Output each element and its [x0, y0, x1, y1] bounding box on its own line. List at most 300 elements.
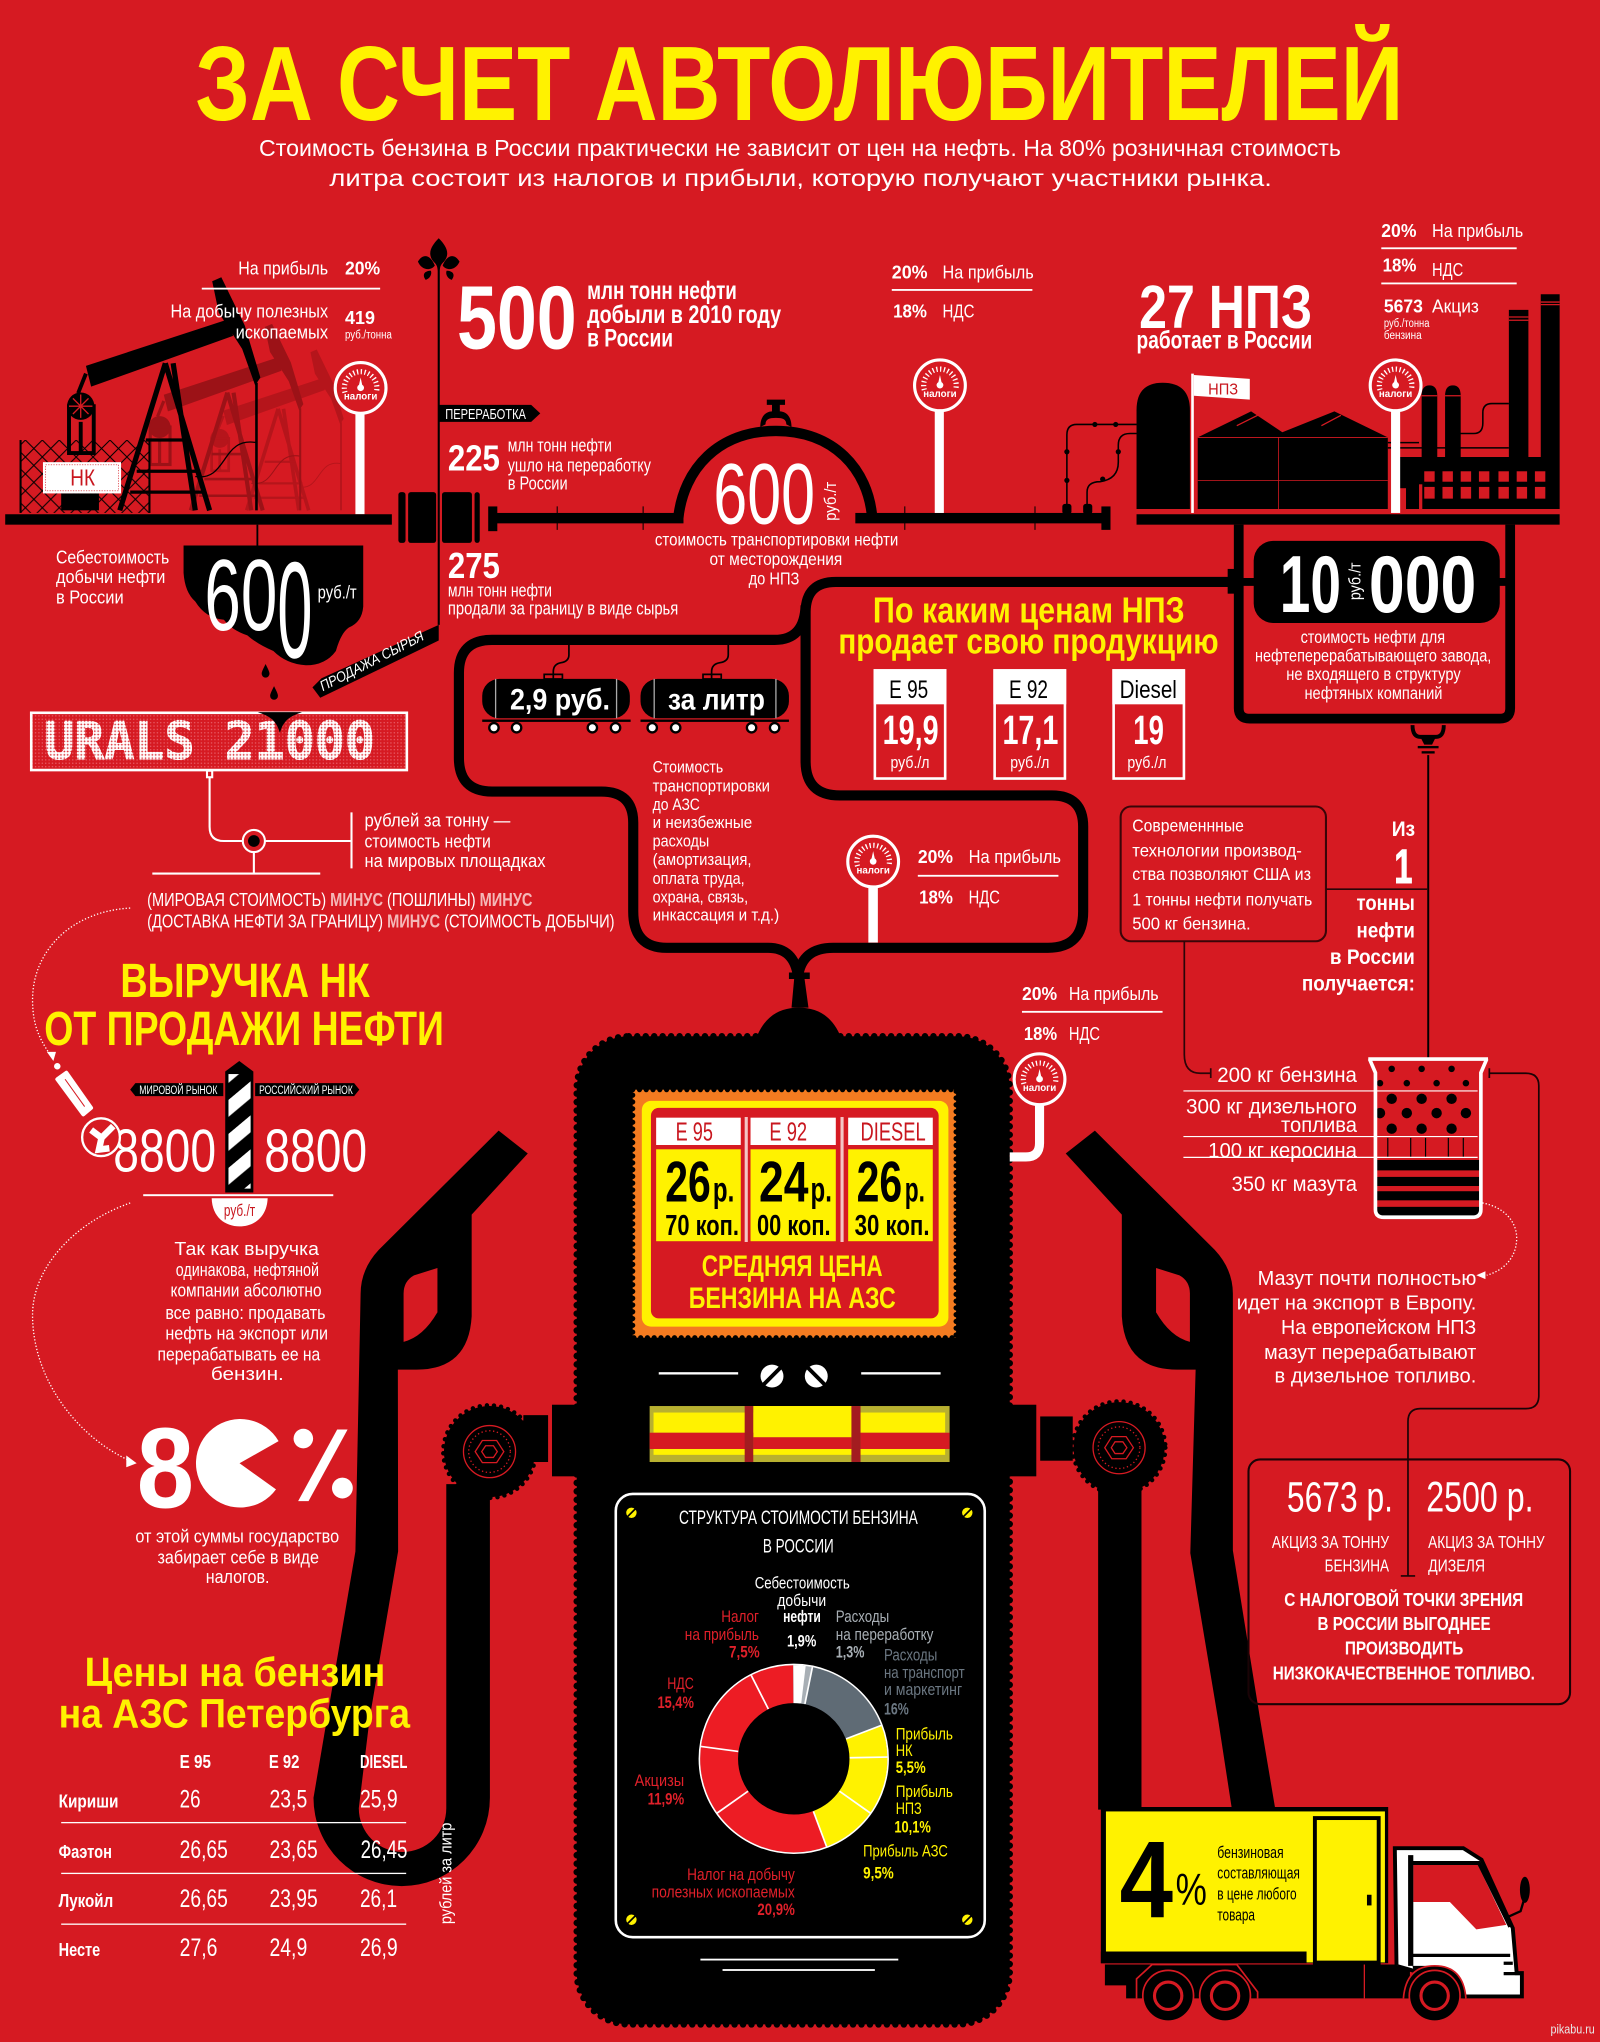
text: state share	[135, 1527, 339, 1587]
pump price screen: СРЕДНЯЯ ЦЕНА	[702, 1250, 883, 1283]
text: transport to stations: Стоимость	[653, 758, 723, 777]
truck percent: %	[1176, 1866, 1207, 1915]
tag: processing: ПЕРЕРАБОТКА	[445, 406, 526, 423]
gauge: transport	[915, 360, 965, 513]
valve and line to beaker	[1413, 725, 1444, 1058]
table values: 23,65	[269, 1837, 318, 1864]
cost pill	[1254, 541, 1500, 623]
donut labels: expenses: Расходы	[836, 1607, 889, 1626]
text: fuel oil: в дизельное топливо.	[1275, 1366, 1476, 1388]
tax note: transport: 18%	[893, 302, 927, 322]
text: fuel oil: На европейском НПЗ	[1281, 1317, 1476, 1339]
table values: 26	[180, 1787, 200, 1814]
pump jack mid	[149, 324, 303, 510]
truck percent: составляющая	[1217, 1865, 1300, 1883]
text: fuel oil: мазут перерабатывают	[1264, 1342, 1476, 1364]
ticker connector	[152, 771, 352, 874]
tax note: wholesale	[918, 847, 1061, 908]
tax note: refinery: бензина	[1384, 329, 1422, 342]
price card diesel	[1112, 669, 1185, 779]
beaker labels: 350 кг мазута	[1232, 1173, 1357, 1196]
tax note: refinery: На прибыль	[1432, 221, 1523, 241]
price card E 92	[993, 669, 1066, 779]
beaker labels	[1186, 1064, 1357, 1196]
tax note: pump	[1022, 984, 1163, 1044]
tag: crude sale: ПРОДАЖА СЫРЬЯ	[317, 628, 427, 695]
stat: transport 600: 600	[713, 446, 815, 542]
excise conclusion: ПРОИЗВОДИТЬ	[1345, 1638, 1463, 1659]
truck percent	[1120, 1820, 1300, 1942]
text: from 1 ton: получается:	[1302, 972, 1415, 996]
text: transport to stations: до АЗС	[653, 795, 700, 814]
silo	[1137, 383, 1190, 509]
oil blob with 600: 60	[204, 538, 277, 652]
text: transport to stations: транспортировки	[653, 776, 770, 795]
price card diesel: Diesel	[1120, 677, 1177, 704]
table values: 26,65	[180, 1837, 228, 1864]
excise petrol: 5673 р.	[1287, 1473, 1393, 1521]
ground bar: refinery	[1137, 514, 1560, 525]
text: state share: налогов.	[206, 1567, 269, 1587]
tax note: transport	[892, 263, 1034, 322]
donut labels: profit: Прибыль АЗС	[863, 1841, 948, 1860]
gauge and pipe: pump taxes	[1010, 1054, 1065, 1157]
callout: US technology: технологии производ-	[1132, 841, 1302, 861]
donut labels: production cost: добычи	[777, 1591, 826, 1610]
dome tap	[760, 400, 792, 427]
excise diesel: ДИЗЕЛЯ	[1428, 1555, 1485, 1575]
donut labels: tax red: Налог на добычу	[687, 1865, 795, 1884]
grade E 92	[751, 1116, 836, 1242]
donut labels: expenses: 1,3%	[836, 1642, 864, 1661]
flag: НПЗ	[1208, 381, 1238, 398]
table row names: Фаэтон	[59, 1842, 112, 1862]
oil field: pump jacks	[20, 277, 344, 513]
factory	[1397, 294, 1560, 509]
table values: 26,1	[360, 1886, 397, 1913]
tax note: refinery: 18%	[1383, 255, 1416, 275]
stat: 225: 225	[448, 438, 500, 479]
donut labels: tax red: полезных ископаемых	[652, 1882, 795, 1901]
stat: 275: 275	[448, 545, 500, 586]
text: production cost	[56, 548, 169, 607]
tax note: extraction: На добычу полезных	[171, 302, 328, 322]
stat: transport 600: руб./т	[821, 481, 840, 521]
table header: DIESEL	[360, 1752, 407, 1772]
text: fuel oil: идет на экспорт в Европу.	[1237, 1293, 1476, 1315]
text: refinery oil cost: стоимость нефти для	[1301, 627, 1445, 647]
tax note: wholesale: НДС	[969, 888, 1000, 908]
price card diesel: руб./л	[1127, 754, 1166, 772]
text: from 1 ton: 1	[1394, 840, 1413, 894]
ticker connector node	[248, 835, 260, 847]
text: transport to stations: и неизбежные	[653, 813, 752, 832]
truck chassis	[1105, 1965, 1410, 1998]
oil drips	[262, 664, 278, 700]
tax note: refinery: НДС	[1432, 260, 1463, 280]
grade diesel: 26	[857, 1151, 902, 1215]
tax note: wholesale: 18%	[919, 888, 953, 908]
oil blob with 600: 0	[277, 534, 312, 687]
tax note: transport: На прибыль	[943, 263, 1034, 283]
icon: barrels	[398, 492, 480, 543]
tax note: extraction: руб./тонна	[345, 328, 392, 341]
donut labels: profit: Прибыль	[896, 1724, 953, 1743]
tax note: extraction	[171, 259, 392, 342]
panel: cost structure	[616, 1494, 985, 1937]
tax note: wholesale: На прибыль	[969, 847, 1061, 867]
text: world price note: на мировых площадках	[365, 851, 545, 871]
donut labels: tax red: 15,4%	[657, 1693, 694, 1712]
frame: refinery oil cost: руб./т	[1345, 562, 1364, 600]
tax note: pump: На прибыль	[1069, 984, 1159, 1004]
heading: NK revenue: ОТ ПРОДАЖИ НЕФТИ	[44, 1002, 444, 1056]
text: fuel oil	[1237, 1268, 1476, 1388]
НК plate	[43, 462, 121, 510]
heading: refinery prices: По каким ценам НПЗ	[873, 589, 1185, 630]
text: revenue explanation: одинакова, нефтяной	[176, 1260, 319, 1280]
callout: US technology: ства позволяют США из	[1132, 864, 1311, 884]
grade diesel: р.	[905, 1171, 925, 1210]
excise petrol: БЕНЗИНА	[1325, 1555, 1389, 1575]
donut chart	[699, 1664, 888, 1853]
tank wagon: per liter: за литр	[668, 684, 765, 717]
tax note: pump: 18%	[1024, 1024, 1057, 1044]
subtitle: Стоимость бензина в России практически не зависит от цен на нефть. На 80% розничная стоимость	[259, 135, 1341, 161]
text: revenue explanation: компании абсолютно	[171, 1281, 322, 1301]
table values: 26,9	[360, 1935, 398, 1962]
stat: 275	[448, 545, 678, 618]
text: revenue explanation: бензин.	[211, 1364, 284, 1384]
icon: magnifier tool	[54, 1063, 120, 1156]
pipework joints	[1062, 422, 1121, 514]
grade E 92: E 92	[769, 1116, 807, 1146]
excise diesel: АКЦИЗ ЗА ТОННУ	[1428, 1532, 1545, 1552]
text: fuel oil: Мазут почти полностью	[1258, 1268, 1476, 1290]
beaker labels: 100 кг керосина	[1208, 1139, 1357, 1162]
tax note: refinery: руб./тонна	[1384, 317, 1430, 330]
grade E 95: E 95	[676, 1116, 713, 1146]
excise petrol	[1272, 1473, 1393, 1575]
connector to oil blob	[256, 525, 258, 547]
gauge: wholesale	[848, 836, 899, 943]
callout: US technology	[1121, 807, 1428, 1078]
stat: 500 million tons	[457, 268, 781, 368]
heading: refinery prices	[838, 589, 1219, 662]
donut labels: expenses: Расходы	[884, 1646, 937, 1665]
truck percent: 4	[1120, 1820, 1173, 1942]
text: transport to stations: оплата труда,	[653, 869, 745, 888]
text: world price note	[365, 811, 545, 871]
grade E 95: 70 коп.	[665, 1210, 739, 1242]
unit tab: руб./т	[224, 1201, 255, 1220]
right hose wheel	[1073, 1401, 1165, 1494]
oil blob with 600	[184, 534, 363, 687]
gauge: extraction	[335, 363, 386, 514]
tax note: transport: 20%	[892, 263, 928, 283]
text: state share: забирает себе в виде	[158, 1548, 319, 1568]
pump price screen	[633, 1090, 956, 1338]
truck	[1101, 1807, 1530, 2021]
tax note: refinery: 5673	[1384, 296, 1423, 316]
table: petersburg prices	[59, 1752, 407, 1962]
panel heading: СТРУКТУРА СТОИМОСТИ БЕНЗИНА	[679, 1507, 918, 1529]
text: from 1 ton: тонны	[1357, 891, 1415, 915]
price card E 95: E 95	[889, 677, 928, 704]
beaker labels: 200 кг бензина	[1217, 1064, 1357, 1087]
excise conclusion: С НАЛОГОВОЙ ТОЧКИ ЗРЕНИЯ	[1284, 1589, 1523, 1610]
donut labels: tax red: на прибыль	[685, 1625, 759, 1644]
unit label: rubles per liter: рублей за литр	[437, 1823, 456, 1924]
tax note: pump: 20%	[1022, 984, 1057, 1004]
tax note: extraction: 20%	[345, 259, 380, 279]
panel heading: В РОССИИ	[763, 1535, 834, 1557]
callout: US technology: 500 кг бензина.	[1132, 914, 1251, 934]
table values: 26,45	[361, 1837, 407, 1864]
refinery pipework	[1067, 404, 1509, 509]
donut labels: expenses: 16%	[884, 1700, 909, 1719]
table header: E 92	[269, 1752, 299, 1772]
donut labels: profit: НПЗ	[896, 1799, 922, 1818]
frame: refinery oil cost	[1228, 525, 1510, 719]
text: from 1 ton: Из	[1392, 817, 1415, 841]
oil blob with 600: руб./т	[318, 582, 357, 602]
excise diesel	[1426, 1473, 1545, 1575]
gauge and pipe: pump taxes: налоги	[1023, 1083, 1056, 1094]
truck percent: бензиновая	[1217, 1844, 1284, 1862]
tax note: refinery: 20%	[1381, 221, 1416, 241]
truck percent: в цене любого	[1217, 1885, 1297, 1903]
frame: refinery oil cost: 10	[1280, 540, 1341, 630]
flag	[1191, 374, 1250, 513]
tag: world market: МИРОВОЙ РЫНОК	[139, 1084, 218, 1097]
truck mirror	[1506, 1898, 1524, 1918]
stat: 27 refineries	[1137, 273, 1312, 354]
donut labels: profit: НК	[896, 1741, 913, 1760]
table row names: Кириши	[59, 1792, 118, 1812]
donut labels: tax red: 20,9%	[757, 1900, 795, 1919]
beaker labels: топлива	[1281, 1114, 1357, 1137]
heading: petersburg prices	[59, 1649, 411, 1737]
tag: world market	[130, 1083, 223, 1097]
donut labels: tax red	[635, 1607, 795, 1919]
stat: 225: в России	[508, 474, 568, 494]
grade diesel: DIESEL	[861, 1116, 926, 1146]
donut labels: profit: 9,5%	[863, 1864, 894, 1883]
grade E 95: р.	[713, 1171, 734, 1210]
truck cargo box	[1101, 1807, 1388, 1963]
truck wheels	[1137, 1965, 1466, 2021]
refinery buildings	[1198, 411, 1388, 509]
text: formula: (МИРОВАЯ СТОИМОСТЬ) МИНУС (ПОШЛИНЫ) МИНУС	[147, 890, 532, 910]
text: transport to stations: (амортизация,	[653, 850, 752, 869]
excise conclusion	[1273, 1589, 1535, 1683]
tank wagon: price	[482, 644, 631, 732]
dotted arrow: to tool	[33, 908, 130, 1061]
text: transport to stations: инкассация и т.д.)	[653, 905, 779, 924]
donut labels: expenses: на переработку	[836, 1625, 934, 1644]
oil spade icon and main line	[418, 238, 460, 625]
donut separators	[701, 1666, 887, 1847]
stat: transport 600: до НПЗ	[749, 569, 799, 589]
pump jack main	[67, 277, 260, 510]
price card diesel: 19	[1133, 707, 1164, 753]
donut labels: tax red: 11,9%	[648, 1789, 684, 1808]
price card E 92: 17,1	[1002, 707, 1058, 753]
price card E 92: E 92	[1009, 677, 1048, 704]
text: world price note: стоимость нефти	[365, 832, 491, 852]
gauge: extraction: налоги	[344, 392, 377, 403]
donut labels: expenses: и маркетинг	[884, 1680, 962, 1699]
text: transport to stations: охрана, связь,	[653, 888, 748, 907]
donut labels: production cost: нефти	[783, 1607, 821, 1626]
gauge: wholesale: налоги	[856, 866, 890, 877]
tax note: extraction: На прибыль	[238, 259, 328, 279]
heading: petersburg prices: на АЗС Петербурга	[59, 1691, 411, 1737]
text: production cost: добычи нефти	[56, 567, 165, 587]
text: world price note: рублей за тонну —	[365, 811, 511, 831]
price card E 95: руб./л	[890, 754, 930, 772]
callout: US technology: Современнные	[1132, 816, 1244, 836]
stat: transport 600	[655, 446, 898, 589]
values: 8800	[113, 1118, 367, 1185]
left fuel nozzle and hose	[313, 1131, 528, 1886]
stat: 500 million tons: в России	[587, 325, 673, 352]
price card E 95	[874, 669, 946, 779]
tax note: refinery: Акциз	[1432, 296, 1479, 316]
donut labels: tax red: НДС	[667, 1674, 694, 1693]
text: production cost: Себестоимость	[56, 548, 169, 568]
table header	[180, 1752, 407, 1772]
right fuel nozzle and hose	[1066, 1131, 1275, 1810]
donut labels: expenses	[836, 1607, 965, 1719]
table values: 24,9	[269, 1935, 307, 1962]
gauge: refinery	[1370, 360, 1421, 513]
text: formula	[147, 890, 614, 932]
table values	[180, 1787, 407, 1962]
table values: 25,9	[360, 1787, 398, 1814]
tax note: wholesale: 20%	[918, 847, 953, 867]
text: revenue explanation: нефть на экспорт или	[165, 1324, 328, 1344]
tax note: transport: НДС	[943, 302, 974, 322]
stat: 225	[448, 436, 652, 494]
excise conclusion: В РОССИИ ВЫГОДНЕЕ	[1317, 1613, 1491, 1634]
grade E 92: 00 коп.	[757, 1210, 831, 1242]
stat: 275: млн тонн нефти	[448, 580, 552, 600]
stat: 500 million tons: млн тонн нефти	[587, 278, 737, 305]
border post	[225, 1061, 253, 1193]
pump jack far	[210, 350, 344, 510]
donut labels: expenses: на транспорт	[884, 1663, 965, 1682]
text: from 1 ton	[1302, 817, 1415, 996]
beaker labels: 300 кг дизельного	[1186, 1096, 1357, 1119]
text: refinery oil cost: нефтяных компаний	[1304, 683, 1442, 703]
stat: 500 million tons: 500	[457, 268, 577, 368]
truck cab	[1395, 1848, 1522, 1996]
stat: 225: ушло на переработку	[508, 455, 652, 475]
pump screws and lines	[659, 1365, 941, 1388]
pump yellow red stripes	[650, 1406, 950, 1462]
gauge: transport: налоги	[923, 389, 957, 400]
oil pipeline network	[459, 582, 1230, 976]
table values: 23,5	[269, 1787, 307, 1814]
table row names: Несте	[59, 1940, 100, 1960]
heading: refinery prices: продает свою продукцию	[838, 621, 1219, 662]
grade E 95: 26	[665, 1151, 711, 1215]
donut labels: tax red: Налог	[721, 1607, 759, 1626]
table values: 23,95	[269, 1886, 318, 1913]
text: revenue explanation: перерабатывать ее на	[158, 1344, 321, 1364]
excise conclusion: НИЗКОКАЧЕСТВЕННОЕ ТОПЛИВО.	[1273, 1662, 1535, 1683]
grade diesel	[848, 1116, 933, 1242]
donut labels: production cost	[755, 1573, 850, 1650]
stat: 80 percent	[137, 1405, 353, 1533]
heading: NK revenue: ВЫРУЧКА НК	[120, 954, 370, 1008]
panel heading	[679, 1507, 918, 1557]
donut labels: profit: Прибыль	[896, 1782, 953, 1801]
table row names: Лукойл	[59, 1891, 113, 1911]
frame: refinery oil cost: 000	[1369, 540, 1476, 630]
donut labels: tax red: 7,5%	[729, 1642, 760, 1661]
text: refinery oil cost: нефтеперерабатывающего завода,	[1255, 645, 1491, 665]
donut labels: tax red: Акцизы	[635, 1771, 684, 1790]
text: refinery oil cost: не входящего в структуру	[1286, 664, 1461, 684]
beaker	[1183, 1059, 1488, 1217]
tax note: pump: НДС	[1069, 1024, 1100, 1044]
panel bottom lines	[700, 1959, 898, 1971]
text: state share: от этой суммы государство	[135, 1527, 339, 1547]
НК plate: НК	[70, 465, 95, 491]
ground bar: oil field	[5, 514, 392, 525]
pulley spokes	[69, 394, 92, 418]
unit tab	[143, 1194, 333, 1226]
subtitle: литра состоит из налогов и прибыли, которую получают участники рынка.	[329, 165, 1272, 191]
table values: 26,65	[180, 1886, 228, 1913]
stat: 225: млн тонн нефти	[508, 436, 612, 456]
text: transport to stations	[653, 758, 779, 924]
table header: E 95	[180, 1752, 211, 1772]
gauge: refinery: налоги	[1379, 389, 1412, 400]
text: production cost: в России	[56, 587, 124, 607]
values: 8800: 8800	[264, 1118, 367, 1185]
text: revenue explanation: Так как выручка	[174, 1239, 320, 1259]
truck percent: товара	[1217, 1906, 1256, 1924]
heading: petersburg prices: Цены на бензин	[85, 1649, 385, 1695]
box: excise	[1248, 1459, 1570, 1704]
heading: NK revenue	[44, 954, 444, 1056]
grade E 95	[656, 1116, 741, 1242]
donut labels: production cost: 1,9%	[787, 1631, 816, 1650]
grade E 92: р.	[811, 1171, 832, 1210]
dotted arrow: fuel oil	[1476, 1203, 1517, 1279]
table values: 27,6	[180, 1935, 217, 1962]
text: formula: (ДОСТАВКА НЕФТИ ЗА ГРАНИЦУ) МИНУС (СТОИМОСТЬ ДОБЫЧИ)	[147, 912, 614, 932]
price card E 95: 19,9	[883, 707, 939, 753]
text: from 1 ton: в России	[1330, 945, 1415, 969]
pipeline with dome	[488, 400, 1110, 531]
dotted arrow: to 80 percent	[33, 1203, 137, 1467]
tank wagon: per liter	[641, 644, 789, 732]
fence	[20, 440, 150, 513]
tag: russian market: РОССИЙСКИЙ РЫНОК	[259, 1084, 353, 1097]
URALS ticker: URALS 21000	[44, 712, 375, 772]
fuel pump body	[523, 973, 1073, 2024]
excise diesel: 2500 р.	[1426, 1473, 1534, 1521]
callout: US technology: 1 тонны нефти получать	[1132, 890, 1312, 910]
subtitle	[259, 135, 1341, 191]
refinery	[1062, 294, 1560, 525]
text: transport to stations: расходы	[653, 832, 709, 851]
